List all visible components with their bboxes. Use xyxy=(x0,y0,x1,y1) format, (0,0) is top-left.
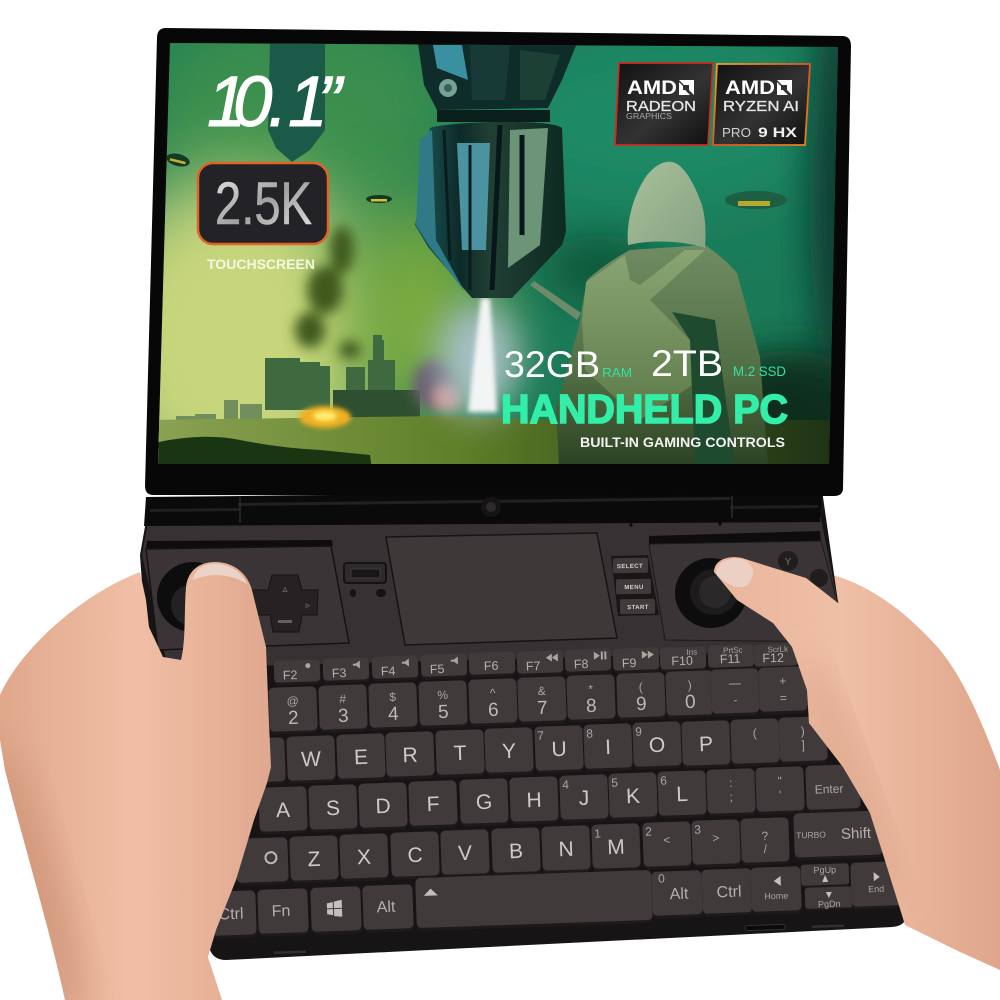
d-pad: ▹ xyxy=(306,600,311,610)
home key row: 5 xyxy=(611,776,618,790)
space bar key row: Alt xyxy=(376,899,396,916)
right control panel xyxy=(649,531,848,642)
space bar key row: 0 xyxy=(658,871,665,886)
2.5K badge xyxy=(198,163,328,244)
space bar key row: End xyxy=(868,884,884,894)
number key row: 4 xyxy=(388,704,399,725)
function key row: F2 xyxy=(283,668,298,682)
storage spec: M.2 SSD xyxy=(733,364,786,379)
RAM spec: 32GB xyxy=(504,344,600,385)
laptop lid bezel xyxy=(145,28,851,496)
energy beam xyxy=(438,298,518,414)
space bar key row: Ctrl xyxy=(218,906,244,924)
tree line xyxy=(158,436,372,464)
number key row: 0 xyxy=(685,692,696,713)
bottom letter key row: / xyxy=(763,842,768,856)
QWERTY key row: E xyxy=(354,746,368,769)
touchscreen label: TOUCHSCREEN xyxy=(207,257,315,272)
left hand xyxy=(0,562,271,1000)
number key row xyxy=(268,666,808,735)
left thumbnail xyxy=(193,564,247,584)
bottom letter key row: Shift xyxy=(841,825,872,843)
number key row: — xyxy=(728,676,741,690)
QWERTY key row: U xyxy=(551,738,567,761)
bottom letter key row: TURBO xyxy=(796,829,826,840)
touchpad xyxy=(386,533,617,645)
deck body xyxy=(140,490,906,960)
d-pad xyxy=(252,575,318,632)
number key row: ^ xyxy=(490,686,496,700)
mode switch xyxy=(344,563,386,597)
left joystick xyxy=(157,562,229,632)
QWERTY key row: P xyxy=(699,733,713,756)
QWERTY key row xyxy=(236,716,828,786)
QWERTY key row: 9 xyxy=(635,725,642,739)
function key row: F3 xyxy=(332,666,347,680)
hand behind device: right fingers xyxy=(830,575,1000,970)
bottom letter key row: V xyxy=(458,842,472,865)
home key row: J xyxy=(578,787,590,810)
smoke plume xyxy=(295,226,361,359)
number key row: $ xyxy=(389,690,397,704)
number key row: & xyxy=(537,684,546,698)
home key row: ' xyxy=(779,788,782,802)
number key row: 7 xyxy=(537,698,548,719)
number key row: + xyxy=(779,674,786,688)
function key row: F4 xyxy=(381,664,396,678)
number key row: @ xyxy=(286,694,299,708)
function key row: F10 xyxy=(671,654,693,668)
storage spec: 2TB xyxy=(651,343,723,384)
d-pad: ▵ xyxy=(282,584,288,595)
home key row: ; xyxy=(729,790,733,804)
number key row: 3 xyxy=(338,706,349,727)
hinge xyxy=(144,490,822,526)
QWERTY key row: Y xyxy=(502,740,516,763)
space bar key row: Home xyxy=(764,891,788,901)
badge: AMD Radeon Graphics: AMD xyxy=(627,78,677,99)
badge: AMD Ryzen AI Pro 9 HX: 9 HX xyxy=(758,124,798,140)
giant ship xyxy=(415,43,577,298)
function key row: F5 xyxy=(430,662,445,676)
number key row: 9 xyxy=(636,694,647,715)
left control panel xyxy=(146,540,349,650)
explosion xyxy=(299,406,351,428)
right joystick xyxy=(675,558,747,628)
function key row: ScrLk xyxy=(767,645,789,654)
home key row: K xyxy=(626,785,640,808)
badge: AMD Ryzen AI Pro 9 HX: AMD xyxy=(725,78,775,99)
bottom letter key row: C xyxy=(407,844,423,867)
product title: HANDHELD PC xyxy=(501,386,788,432)
function key row xyxy=(274,643,798,686)
home key row: " xyxy=(777,774,782,788)
home key row: 4 xyxy=(562,778,569,792)
QWERTY key row: O xyxy=(648,734,666,757)
number key row: 5 xyxy=(438,702,449,723)
function key row: PrtSc xyxy=(723,646,743,655)
city skyline xyxy=(176,335,420,420)
number key row: 6 xyxy=(488,700,499,721)
function key row: F11 xyxy=(720,652,741,666)
right hand and thumb xyxy=(714,557,1000,970)
number key row: # xyxy=(339,692,347,706)
home key row: L xyxy=(676,783,688,806)
function buttons: MENU xyxy=(624,585,644,591)
home key row: Enter xyxy=(814,782,844,797)
badge: AMD Radeon Graphics: GRAPHICS xyxy=(626,112,672,121)
device lower deck xyxy=(140,490,906,960)
background alien ship xyxy=(268,43,325,162)
bottom letter key row: N xyxy=(558,838,574,861)
hooded figure xyxy=(530,162,768,467)
function key row: F6 xyxy=(484,659,499,673)
debris cloud xyxy=(413,359,462,412)
QWERTY key row: T xyxy=(453,742,467,765)
bottom letter key row: ? xyxy=(761,829,769,843)
home key row xyxy=(258,764,861,835)
top control panel xyxy=(142,514,848,668)
QWERTY key row: ] xyxy=(801,738,805,752)
home key row: : xyxy=(729,776,733,790)
space bar key row: Fn xyxy=(271,903,291,920)
chin ports and speakers xyxy=(274,924,844,954)
bottom letter key row: 2 xyxy=(645,825,652,839)
badge: AMD Radeon Graphics: RADEON xyxy=(626,98,696,115)
badge: AMD Ryzen AI Pro 9 HX: RYZEN AI xyxy=(723,98,799,115)
number key row: * xyxy=(588,682,594,696)
function buttons: SELECT xyxy=(617,564,643,570)
home key row: 6 xyxy=(660,774,667,788)
number key row: = xyxy=(780,691,787,705)
badge: AMD Radeon Graphics xyxy=(615,63,713,145)
space bar key row: PgUp xyxy=(813,865,836,875)
screen image xyxy=(158,43,838,464)
scene background xyxy=(158,43,838,462)
microphone dots xyxy=(629,522,722,527)
size headline: 10.1” xyxy=(207,63,345,142)
QWERTY key row: W xyxy=(301,748,322,771)
bottom letter key row: Z xyxy=(307,848,321,871)
bottom letter key row: 1 xyxy=(594,827,601,841)
bottom letter key row: 3 xyxy=(694,823,701,837)
number key row: % xyxy=(437,688,449,702)
controls caption: BUILT-IN GAMING CONTROLS xyxy=(580,435,785,450)
function key row: F8 xyxy=(574,657,589,671)
badge: AMD Ryzen AI Pro 9 HX: PRO xyxy=(722,126,751,140)
bottom letter key row: M xyxy=(607,836,625,859)
right hand shading xyxy=(804,676,892,882)
home key row: G xyxy=(475,791,493,814)
number key row: ) xyxy=(687,678,692,692)
home key row: A xyxy=(276,799,290,822)
bottom letter key row xyxy=(235,810,883,886)
bottom letter key row: B xyxy=(509,840,523,863)
home key row: H xyxy=(526,789,542,812)
home key row: F xyxy=(426,793,440,816)
function buttons: START xyxy=(627,605,649,611)
QWERTY key row: ) xyxy=(800,724,805,738)
QWERTY key row: ( xyxy=(752,726,757,740)
RAM spec: RAM xyxy=(602,365,632,380)
small flying saucers xyxy=(165,151,787,209)
space bar key row xyxy=(211,861,902,939)
bottom letter key row: X xyxy=(357,846,371,869)
QWERTY key row: 7 xyxy=(537,729,544,743)
function key row: F12 xyxy=(762,651,784,665)
bottom letter key row: < xyxy=(663,833,671,847)
face buttons xyxy=(778,551,828,587)
home key row: S xyxy=(326,797,340,820)
space bar key row: Ctrl xyxy=(716,884,742,901)
keyboard xyxy=(211,643,902,939)
space bar key row: Alt xyxy=(669,886,689,903)
number key row: ( xyxy=(638,680,643,694)
space bar key row: PgDn xyxy=(818,899,841,909)
number key row: 8 xyxy=(586,696,597,717)
function key row: F9 xyxy=(622,656,637,670)
face buttons: Y xyxy=(785,557,792,568)
right thumbnail xyxy=(716,559,753,587)
home key row: D xyxy=(375,795,391,818)
left hand shading xyxy=(0,730,97,1000)
2.5K badge: 2.5K xyxy=(215,170,312,237)
bottom letter key row: > xyxy=(712,831,720,845)
number key row: - xyxy=(733,693,738,707)
QWERTY key row: R xyxy=(402,744,418,767)
QWERTY key row: I xyxy=(605,736,611,759)
function buttons xyxy=(611,555,659,616)
ground xyxy=(158,416,830,464)
storage spec xyxy=(651,343,786,384)
QWERTY key row: 8 xyxy=(586,727,593,741)
badge: AMD Ryzen AI Pro 9 HX xyxy=(713,64,810,145)
function key row: F7 xyxy=(526,659,541,673)
number key row: 2 xyxy=(288,708,299,729)
function key row: Ins xyxy=(686,648,697,657)
